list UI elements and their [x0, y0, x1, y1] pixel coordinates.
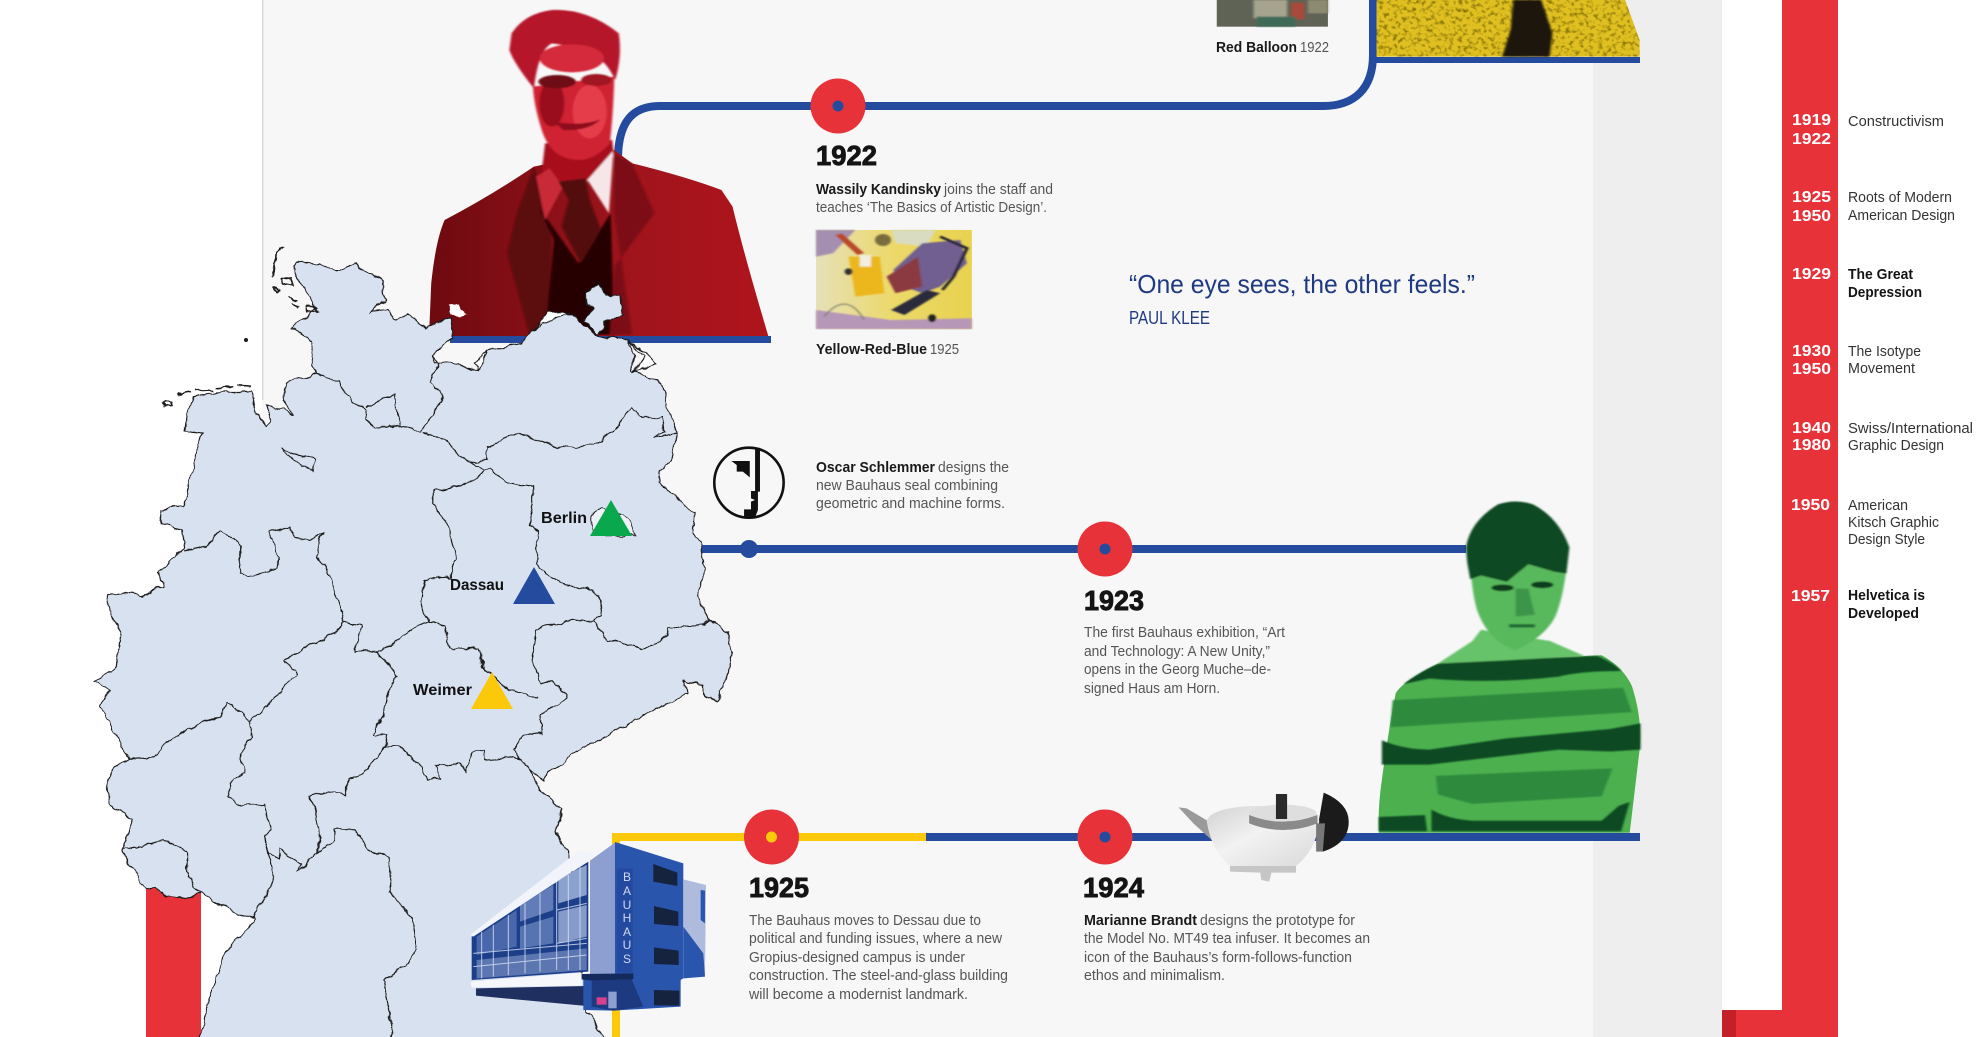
sidebar: Roots of Modern American Design: Roots of Modern: [1848, 189, 1952, 206]
text: Kandinsky: joins the staff and: [943, 181, 1053, 198]
timeline line: 1924 segment: [926, 833, 1640, 841]
text: Oscar Schlemmer: Oscar Schlemmer: [816, 459, 935, 476]
text: 1924 Marianne Brandt: ethos and minimalism.: [1084, 967, 1225, 984]
marker: Weimer triangle: [471, 672, 513, 709]
sidebar: The Isotype Movement: 1930: [1792, 343, 1831, 360]
map of Germany: [95, 246, 732, 1037]
text: 1923 exhibition: opens in the Georg Muche–de-: [1084, 661, 1271, 678]
sidebar: American Kitsch Graphic Design Style: 1950: [1791, 497, 1830, 514]
sidebar: Swiss/International Graphic Design: [1792, 420, 1973, 454]
sidebar: Constructivism: 1922: [1792, 131, 1831, 148]
marker: Berlin triangle: [590, 500, 632, 536]
text: Kandinsky: teaches ‘The Basics of Artistic Design’.: [816, 199, 1047, 216]
illustration: Bauhaus building: [470, 842, 706, 1011]
timeline line: 1923 segment: [700, 545, 1466, 553]
sidebar: Swiss/International Graphic Design: 1980: [1792, 437, 1831, 454]
marker: Dutch coast dot: [244, 338, 248, 342]
text: 1923 exhibition: The first Bauhaus exhibition, “Art: [1084, 624, 1286, 641]
text: 1923 exhibition: signed Haus am Horn.: [1084, 680, 1220, 697]
text: Kandinsky: Wassily Kandinsky: [816, 181, 942, 198]
text: 1925 move to Dessau: construction. The steel-and-glass building: [749, 967, 1008, 984]
text: 1923 exhibition: [1084, 624, 1286, 697]
marker: seal dot: [740, 540, 758, 558]
sidebar: American Kitsch Graphic Design Style: [1791, 497, 1939, 548]
sidebar: The Great Depression: [1792, 266, 1922, 301]
text: Oscar Schlemmer: [816, 459, 1009, 512]
marker: 1923: [1078, 522, 1132, 576]
text: 1925 move to Dessau: The Bauhaus moves to Dessau due to: [749, 912, 981, 929]
artwork: Red Balloon: [1217, 0, 1328, 27]
text: 1924 Marianne Brandt: [1084, 912, 1370, 984]
timeline line: top curve: [618, 0, 1373, 160]
building lettering: BAUHAUS: [623, 870, 631, 966]
marker: Dassau triangle: [513, 567, 555, 604]
heading: 1925: 1925: [749, 872, 809, 903]
sidebar: Helvetica is Developed: 1957: [1791, 588, 1830, 605]
text: 1924 Marianne Brandt: designs the prototype for: [1200, 912, 1355, 929]
heading: 1922: 1922: [816, 140, 877, 171]
label: Berlin: Berlin: [541, 510, 587, 527]
portrait: yellow figure: [1377, 0, 1640, 57]
sidebar: Constructivism: 1919: [1792, 112, 1831, 129]
text: Kandinsky: [816, 181, 1053, 216]
text: 1924 Marianne Brandt: icon of the Bauhaus’s form-follows-function: [1084, 949, 1352, 966]
quote: Paul Klee: [1129, 269, 1475, 328]
text: 1923 exhibition: and Technology: A New Unity,”: [1084, 643, 1270, 660]
text: 1925 move to Dessau: [748, 912, 1008, 1003]
caption: Yellow-Red-Blue: Yellow-Red-Blue: [816, 341, 927, 358]
quote: Paul Klee: “One eye sees, the other feels.”: [1129, 269, 1475, 299]
sidebar: American Kitsch Graphic Design Style: American: [1848, 497, 1908, 514]
text: 1925 move to Dessau: Gropius-designed campus is under: [749, 949, 965, 966]
icon: Bauhaus seal: [714, 448, 784, 518]
right red column: [1722, 0, 1838, 1037]
sidebar: The Isotype Movement: Movement: [1848, 360, 1916, 377]
heading: 1923: 1923: [1084, 585, 1144, 616]
sidebar: The Isotype Movement: [1792, 343, 1921, 378]
sidebar: Swiss/International Graphic Design: Graphic Design: [1848, 437, 1944, 454]
heading: 1924: 1924: [1083, 872, 1144, 903]
sidebar: The Isotype Movement: The Isotype: [1848, 343, 1921, 360]
illustration: tea infuser: [1179, 793, 1349, 882]
sidebar: Constructivism: [1792, 112, 1944, 148]
label: Weimer: Weimer: [413, 682, 472, 699]
caption: Yellow-Red-Blue: 1925: [930, 341, 959, 358]
sidebar: Helvetica is Developed: Helvetica is: [1848, 587, 1925, 604]
text: 1924 Marianne Brandt: Marianne Brandt: [1084, 912, 1197, 929]
sidebar: The Great Depression: The Great: [1848, 266, 1913, 283]
sidebar: Swiss/International Graphic Design: 1940: [1792, 420, 1831, 437]
sidebar: Constructivism: Constructivism: [1848, 113, 1944, 130]
marker: 1922: [810, 78, 866, 134]
text: 1925 move to Dessau: will become a modernist landmark.: [748, 986, 968, 1003]
text: 1925 move to Dessau: political and funding issues, where a new: [749, 930, 1002, 947]
portrait: Marianne Brandt in green: [1379, 501, 1640, 833]
timeline line: yellow 1925 segment: [612, 833, 926, 1037]
sidebar: The Great Depression: 1929: [1792, 266, 1831, 283]
panel: timeline background: [262, 0, 1722, 1037]
sidebar: The Great Depression: Depression: [1848, 284, 1922, 301]
marker: 1924: [1078, 810, 1132, 864]
sidebar: Helvetica is Developed: Developed: [1848, 605, 1919, 622]
sidebar: American Kitsch Graphic Design Style: Design Style: [1848, 531, 1925, 548]
marker: 1925: [744, 810, 799, 864]
sidebar: Roots of Modern American Design: American Design: [1848, 207, 1955, 224]
sidebar: The Isotype Movement: 1950: [1792, 361, 1831, 378]
text: Oscar Schlemmer: designs the: [938, 459, 1009, 476]
shelf: Kandinsky base: [450, 336, 771, 343]
text: Oscar Schlemmer: geometric and machine forms.: [816, 495, 1005, 512]
sidebar: Swiss/International Graphic Design: Swiss/International: [1848, 420, 1973, 437]
artwork: Yellow-Red-Blue: [816, 230, 972, 329]
shelf: yellow portrait base: [1374, 57, 1640, 63]
text: Oscar Schlemmer: new Bauhaus seal combining: [816, 477, 998, 494]
sidebar: American Kitsch Graphic Design Style: Kitsch Graphic: [1848, 514, 1939, 531]
portrait: Wassily Kandinsky: [429, 10, 768, 336]
sidebar: Roots of Modern American Design: 1950: [1792, 208, 1831, 225]
sidebar: Roots of Modern American Design: [1792, 189, 1955, 225]
caption: Red Balloon: 1922: [1300, 39, 1329, 56]
sidebar: Helvetica is Developed: [1791, 587, 1925, 622]
sidebar: Roots of Modern American Design: 1925: [1792, 189, 1831, 206]
label: Dassau: Dassau: [450, 577, 504, 594]
quote: Paul Klee: PAUL KLEE: [1129, 308, 1210, 328]
caption: Red Balloon: Red Balloon: [1216, 39, 1297, 56]
left red column: [146, 880, 201, 1037]
text: 1924 Marianne Brandt: the Model No. MT49 tea infuser. It becomes an: [1084, 930, 1370, 947]
